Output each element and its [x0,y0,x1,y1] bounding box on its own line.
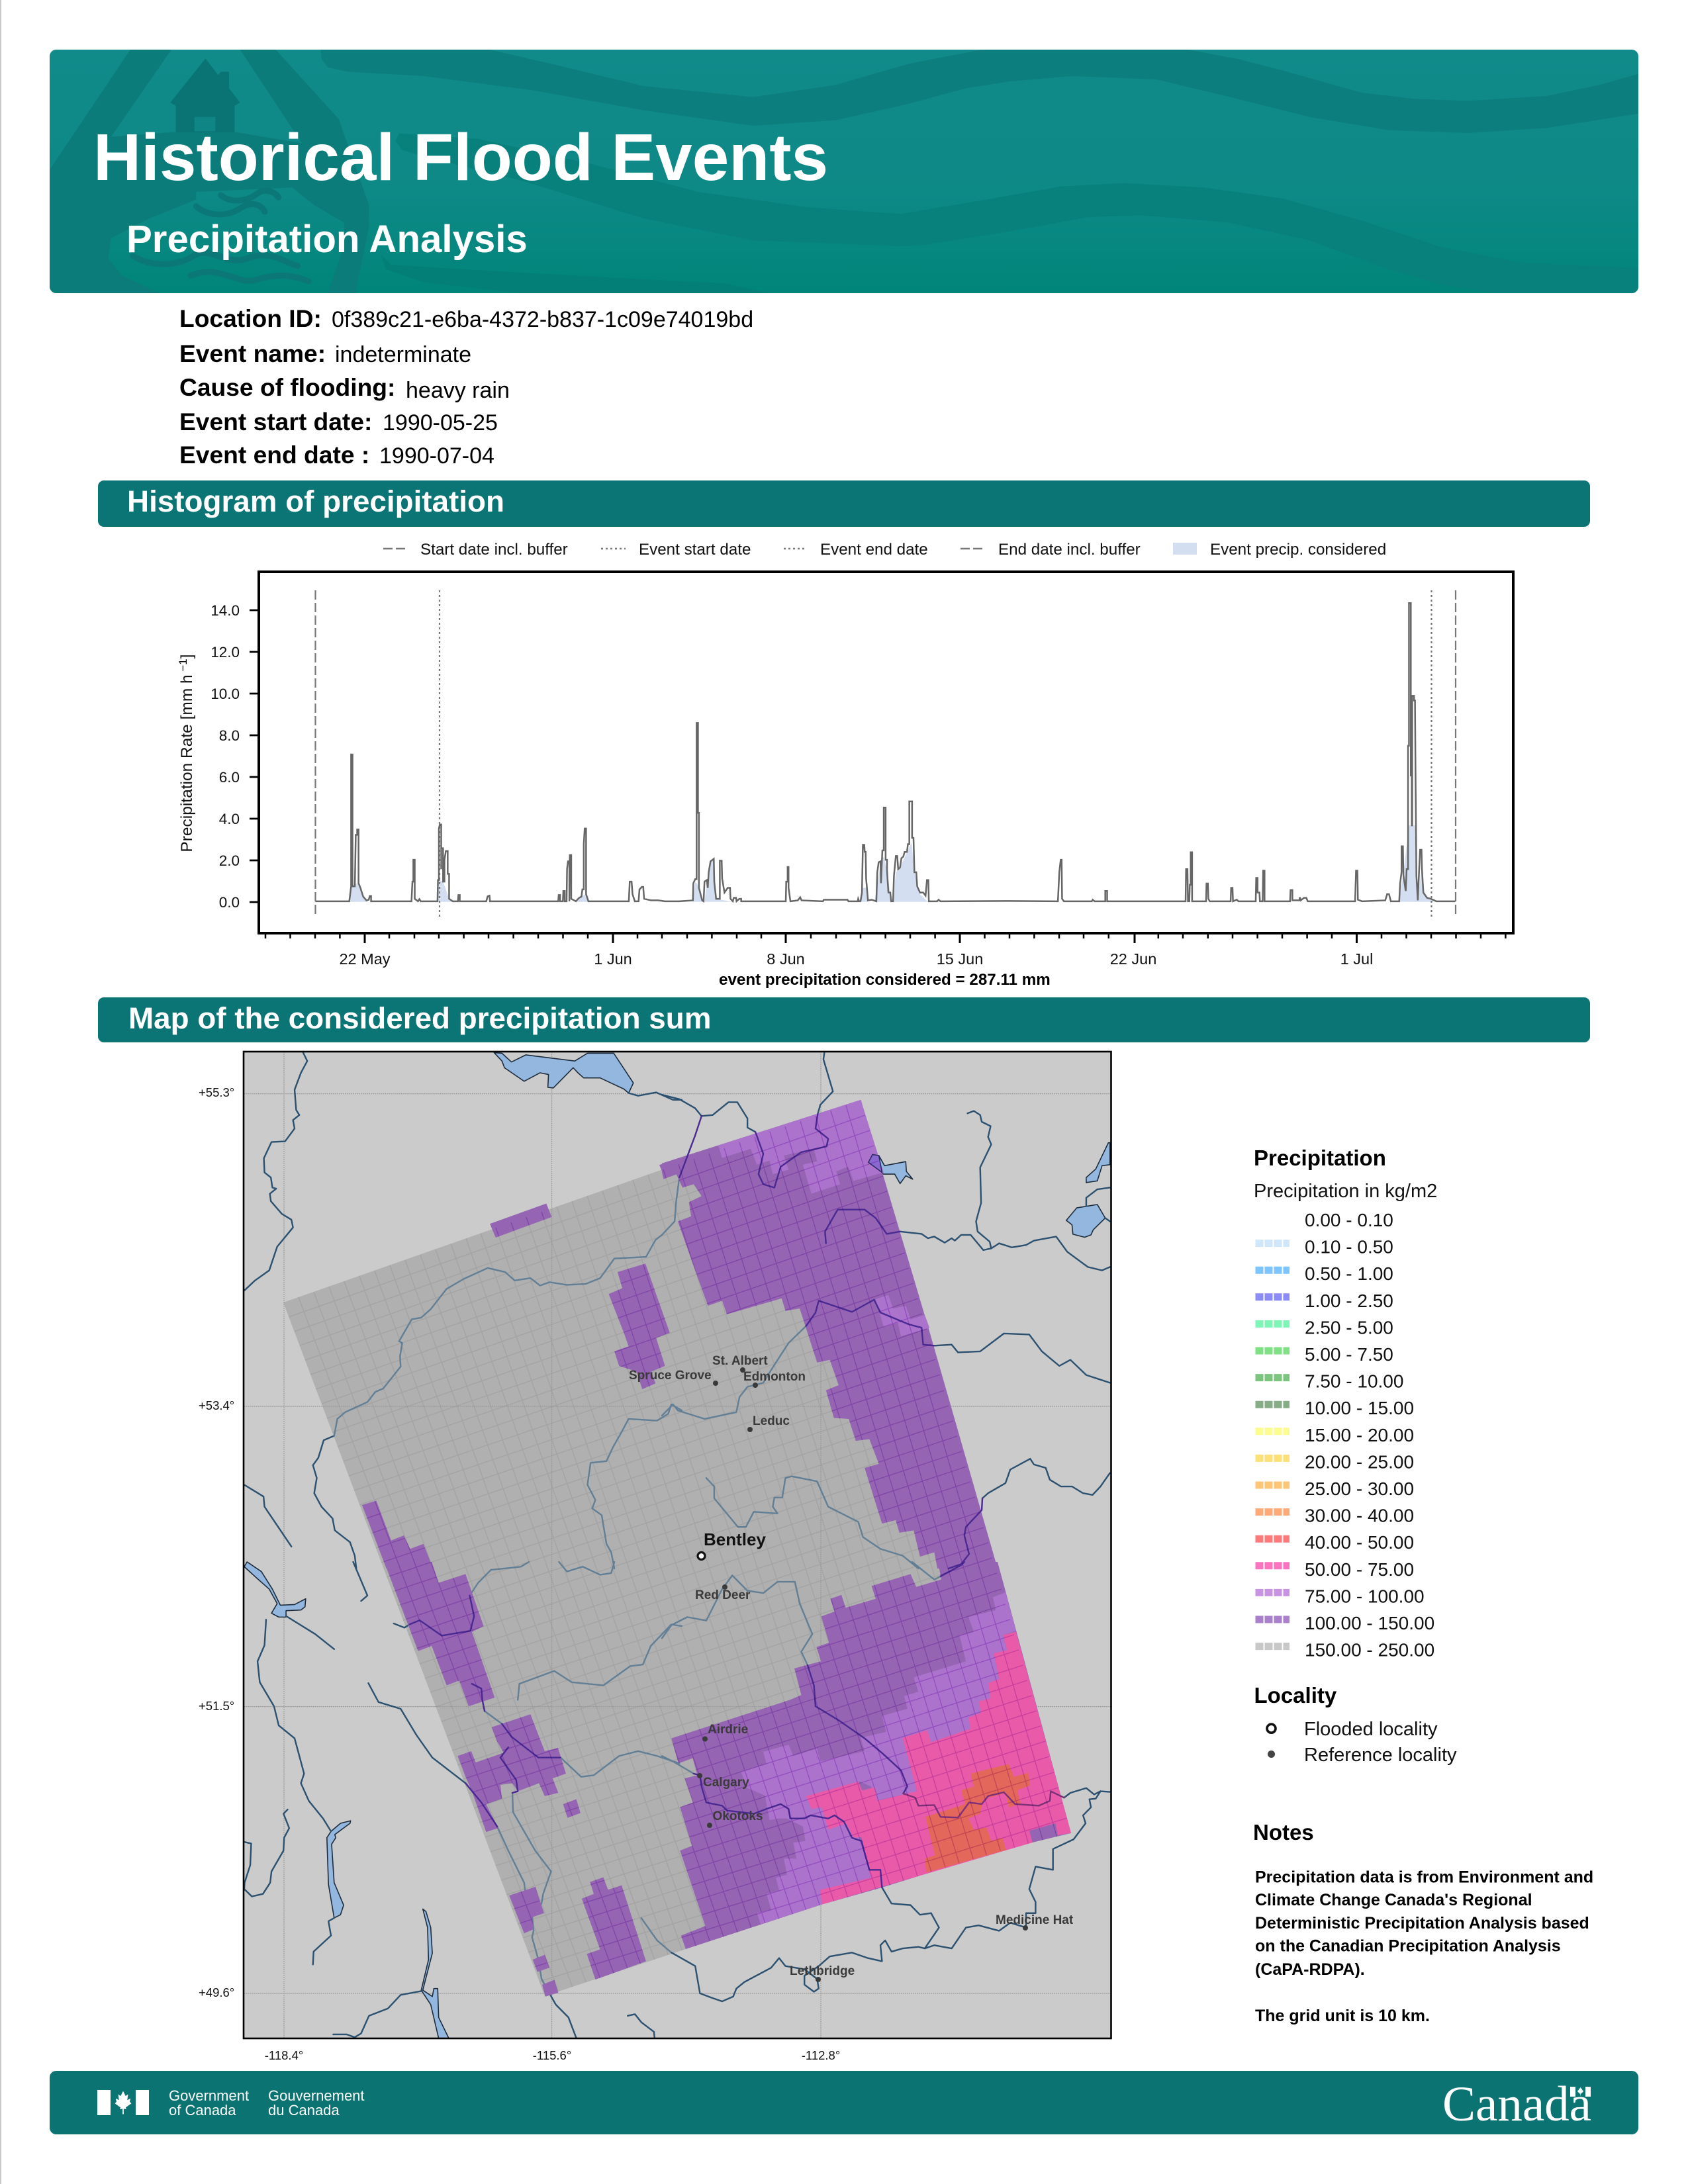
lakes [244,1052,1110,2038]
event metadata: Cause of flooding: [179,373,395,401]
legend: precipitation: 15.00 - 20.00 [1305,1425,1414,1445]
event metadata: Location ID: [179,304,322,332]
y axis: 4.0 [219,811,240,827]
legend: precipitation: Precipitation in kg/m2 [1254,1181,1437,1202]
legend: precipitation: 20.00 - 25.00 [1305,1451,1414,1472]
notes: Precipitation data is from Environment and [1255,1868,1593,1886]
legend: precipitation [1254,1146,1437,1661]
legend: locality: Locality [1254,1683,1337,1707]
reference localities: Calgary [703,1776,749,1790]
event precipitation total: event precipitation considered = 287.11 mm [719,971,1051,989]
y axis: 6.0 [219,769,240,786]
map axis labels: +49.6° [199,1985,234,1999]
map axis labels: -112.8° [802,2048,840,2062]
reference date lines [315,590,1456,917]
section heading: map [98,997,1590,1042]
event metadata [179,304,753,469]
map axis labels: +51.5° [199,1699,234,1713]
legend: precipitation: 2.50 - 5.00 [1305,1317,1393,1338]
x axis [265,933,1505,968]
legend: precipitation: 100.00 - 150.00 [1305,1613,1434,1633]
event metadata: 1990-05-25 [383,410,498,435]
x axis: 8 Jun [767,950,805,968]
event metadata: 0f389c21-e6ba-4372-b837-1c09e74019bd [332,307,753,332]
event metadata: heavy rain [406,378,510,403]
reference localities: Red Deer [695,1588,751,1602]
map axis labels: +55.3° [199,1085,234,1099]
y axis: 10.0 [211,686,240,702]
grid cell lines over coloured cells [367,1105,1067,1991]
government wordmark: of Canada [169,2102,236,2118]
notes: (CaPA-RDPA). [1255,1960,1365,1979]
map of precipitation sum [199,1052,1111,2062]
government wordmark: du Canada [268,2102,340,2118]
legend: precipitation: 75.00 - 100.00 [1305,1586,1425,1606]
pink cells 50-75 [806,1632,1071,1905]
section heading: map: Map of the considered precipitation sum [128,1001,711,1035]
Canada wordmark: Canada [1442,2077,1591,2132]
section heading: histogram: Histogram of precipitation [127,484,504,518]
notes: Notes [1253,1820,1314,1844]
legend: precipitation: 50.00 - 75.00 [1305,1559,1414,1580]
event precipitation fill [350,825,1434,902]
event metadata: Event start date: [179,408,372,435]
reference localities: Leduc [753,1414,790,1428]
chart legend: Event end date [820,541,928,559]
x axis: 22 May [339,950,391,968]
precipitation rate series [315,603,1456,901]
legend: precipitation: 0.50 - 1.00 [1305,1263,1393,1284]
precipitation grid extent [283,1100,1071,1996]
reference localities: Lethbridge [790,1964,855,1978]
legend: locality [1254,1683,1457,1766]
legend: precipitation: 0.10 - 0.50 [1305,1237,1393,1257]
legend: precipitation: 7.50 - 10.00 [1305,1371,1403,1392]
legend: precipitation: 150.00 - 250.00 [1305,1640,1434,1661]
event metadata: Event end date : [179,441,369,469]
reference localities: St. Albert [712,1354,768,1368]
chart frame [259,572,1513,933]
notes: on the Canadian Precipitation Analysis [1255,1936,1561,1955]
x axis: 15 Jun [937,950,983,968]
chart legend: Event start date [639,541,751,559]
red cells 40-50 [925,1764,1030,1872]
x axis: 1 Jun [594,950,632,968]
legend: precipitation: Precipitation [1254,1146,1386,1170]
legend: precipitation: 0.00 - 0.10 [1305,1210,1393,1230]
event metadata: indeterminate [335,342,471,367]
chart legend: Event precip. considered [1210,541,1386,559]
header banner [50,50,1638,293]
map axis labels: +53.4° [199,1398,234,1412]
y axis: 12.0 [211,644,240,660]
reference localities: Okotoks [712,1809,763,1823]
notes: Climate Change Canada's Regional [1255,1891,1532,1909]
map axis labels [199,1085,840,2062]
flooded locality: Bentley [698,1529,766,1559]
y axis: 2.0 [219,852,240,869]
legend: precipitation: 40.00 - 50.00 [1305,1532,1414,1553]
icon: Canadian flag symbol [97,2090,149,2115]
rivers over coloured cells [410,1114,1064,1888]
notes: The grid unit is 10 km. [1255,2007,1430,2025]
government wordmark: Gouvernement [268,2087,365,2104]
y axis: 14.0 [211,602,240,619]
y axis [177,602,259,911]
reference localities: Spruce Grove [629,1369,712,1383]
legend: locality: Reference locality [1304,1745,1457,1766]
precipitation histogram chart [177,572,1513,989]
legend: precipitation: 5.00 - 7.50 [1305,1344,1393,1365]
section heading: histogram [98,480,1590,527]
title: Historical Flood Events [93,121,828,195]
background waves [50,50,1638,293]
chart legend: Start date incl. buffer [420,541,568,559]
legend: locality: Flooded locality [1304,1719,1438,1740]
footer banner [50,2071,1638,2134]
map axis labels: -118.4° [265,2048,303,2062]
event metadata: 1990-07-04 [379,443,494,469]
rivers outside coloured cells [244,1052,1110,2038]
legend: precipitation: 10.00 - 15.00 [1305,1398,1414,1418]
y axis: 0.0 [219,894,240,911]
notes [1253,1820,1593,2025]
light purple cells 75-100 [718,1100,1016,1925]
legend: precipitation: 25.00 - 30.00 [1305,1479,1414,1499]
y axis: ] [178,654,196,659]
chart legend: End date incl. buffer [998,541,1141,559]
legend: precipitation: 1.00 - 2.50 [1305,1291,1393,1311]
reference localities [629,1354,1074,1982]
map axis labels: -115.6° [533,2048,571,2062]
reference localities: Medicine Hat [996,1913,1074,1927]
event metadata: Event name: [179,340,326,367]
subtitle: Precipitation Analysis [126,218,528,261]
x axis: 1 Jul [1340,950,1373,968]
flooded locality: Bentley: Bentley [704,1529,766,1549]
chart legend [383,541,1386,559]
reference localities: Edmonton [743,1370,806,1384]
x axis: 22 Jun [1110,950,1156,968]
y axis: −1 [177,659,189,674]
government wordmark [169,2087,365,2118]
legend: precipitation: 30.00 - 40.00 [1305,1506,1414,1526]
reference localities: Airdrie [708,1723,748,1737]
notes: Deterministic Precipitation Analysis based [1255,1914,1589,1933]
dark purple cells 100-150 [362,1100,1071,1997]
y axis: Precipitation Rate [mm h [178,674,196,852]
government wordmark: Government [169,2087,249,2104]
y axis: 8.0 [219,727,240,744]
